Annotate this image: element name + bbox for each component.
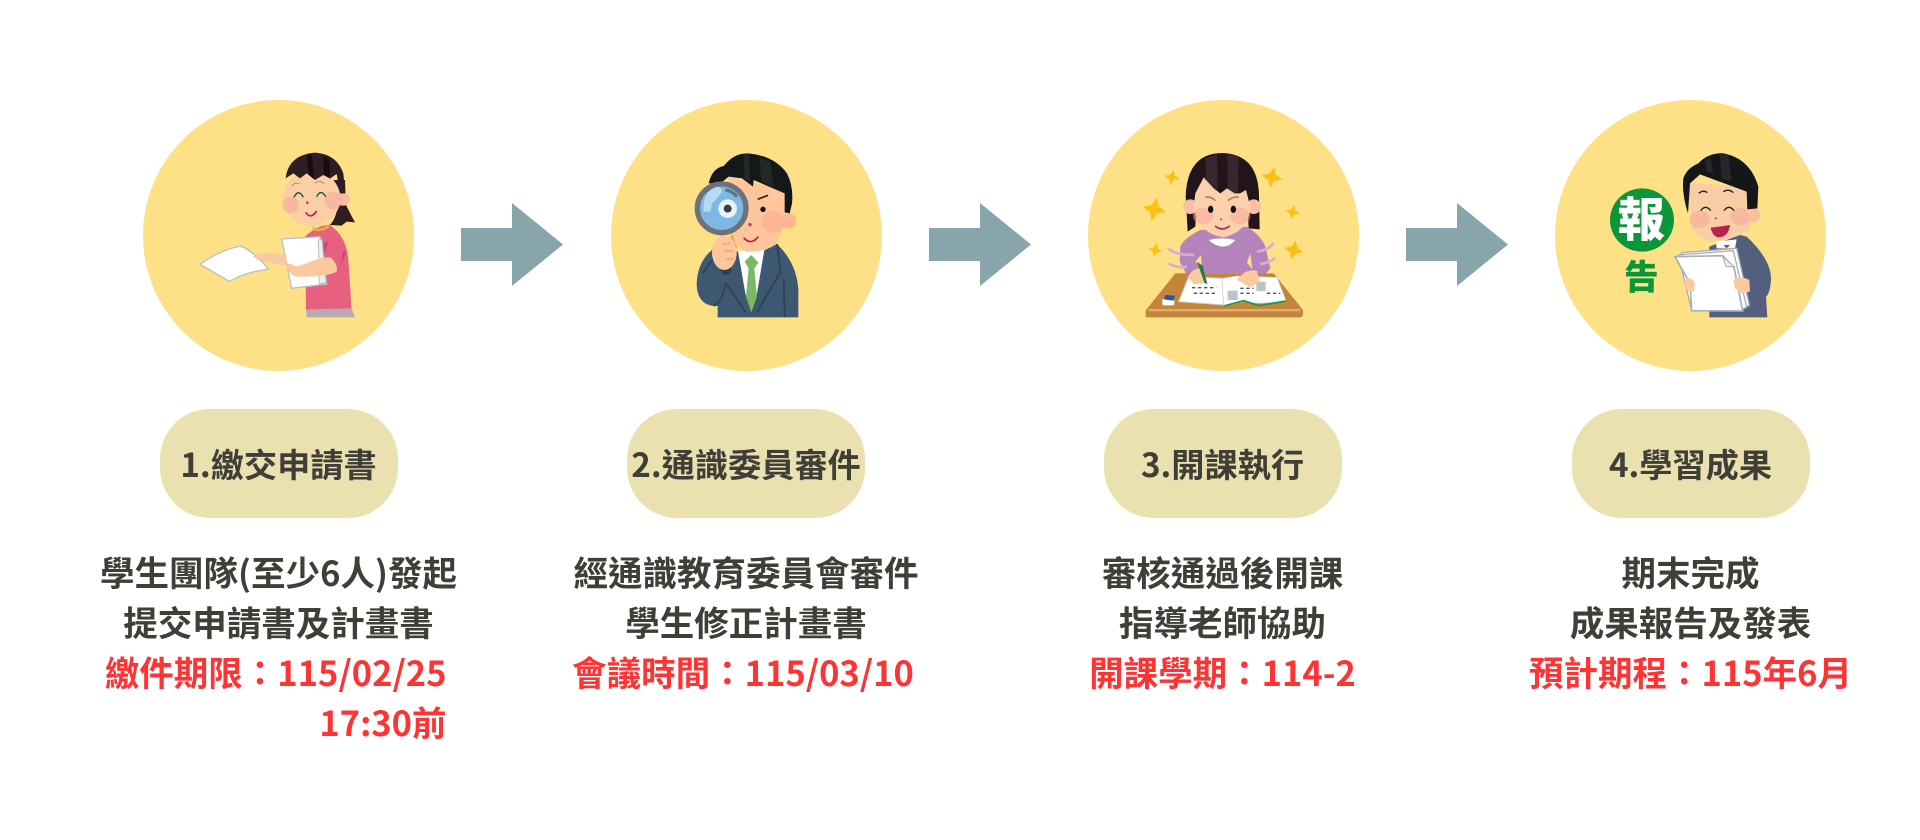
step 2 description: 經通識教育委員會審件 bbox=[574, 546, 918, 596]
step 4 panel bbox=[1529, 100, 1852, 696]
step 1 description: 17:30前 bbox=[319, 696, 446, 746]
step 4 title pill: 4.學習成果 bbox=[1609, 438, 1772, 487]
step 4 title pill bbox=[1572, 409, 1810, 518]
step 1 panel bbox=[100, 100, 457, 746]
step 3 title pill bbox=[1104, 409, 1342, 518]
step 1 title pill: 1.繳交申請書 bbox=[180, 438, 377, 487]
step 3 title pill: 3.開課執行 bbox=[1141, 438, 1304, 487]
step 2 panel bbox=[572, 100, 918, 696]
step 3 description: 審核通過後開課 bbox=[1102, 546, 1343, 596]
arrow 1 bbox=[461, 203, 563, 286]
step 1 description: 提交申請書及計畫書 bbox=[123, 596, 434, 646]
illustration: presenter with report: 告 bbox=[1624, 250, 1659, 300]
step 4 description: 預計期程：115年6月 bbox=[1529, 646, 1852, 696]
step 2 description: 會議時間：115/03/10 bbox=[572, 646, 914, 696]
step 2 title pill bbox=[627, 409, 865, 518]
illustration: presenter with report: 報 bbox=[1618, 182, 1665, 251]
illustration: student handing in papers bbox=[143, 100, 414, 371]
step 4 description bbox=[1529, 546, 1852, 696]
step 2 description: 學生修正計畫書 bbox=[625, 596, 867, 646]
step 3 description: 開課學期：114-2 bbox=[1089, 646, 1356, 696]
step 2 title pill: 2.通識委員審件 bbox=[631, 438, 861, 487]
step 3 description bbox=[1089, 546, 1356, 696]
step 1 description: 學生團隊(至少6人)發起 bbox=[100, 546, 457, 596]
step 4 description: 期末完成 bbox=[1622, 546, 1760, 596]
arrow 2 bbox=[929, 203, 1031, 286]
step 1 description bbox=[100, 546, 457, 746]
illustration: presenter with report bbox=[1555, 100, 1826, 371]
arrow 3 bbox=[1406, 203, 1508, 286]
illustration: student studying at a desk bbox=[1088, 100, 1359, 371]
illustration: committee member with magnifying glass bbox=[611, 100, 882, 371]
step 3 panel bbox=[1088, 100, 1359, 696]
step 1 description: 繳件期限：115/02/25 bbox=[105, 646, 446, 696]
step 1 title pill bbox=[160, 409, 398, 518]
step 3 description: 指導老師協助 bbox=[1119, 596, 1326, 646]
step 2 description bbox=[572, 546, 918, 696]
step 4 description: 成果報告及發表 bbox=[1570, 596, 1811, 646]
